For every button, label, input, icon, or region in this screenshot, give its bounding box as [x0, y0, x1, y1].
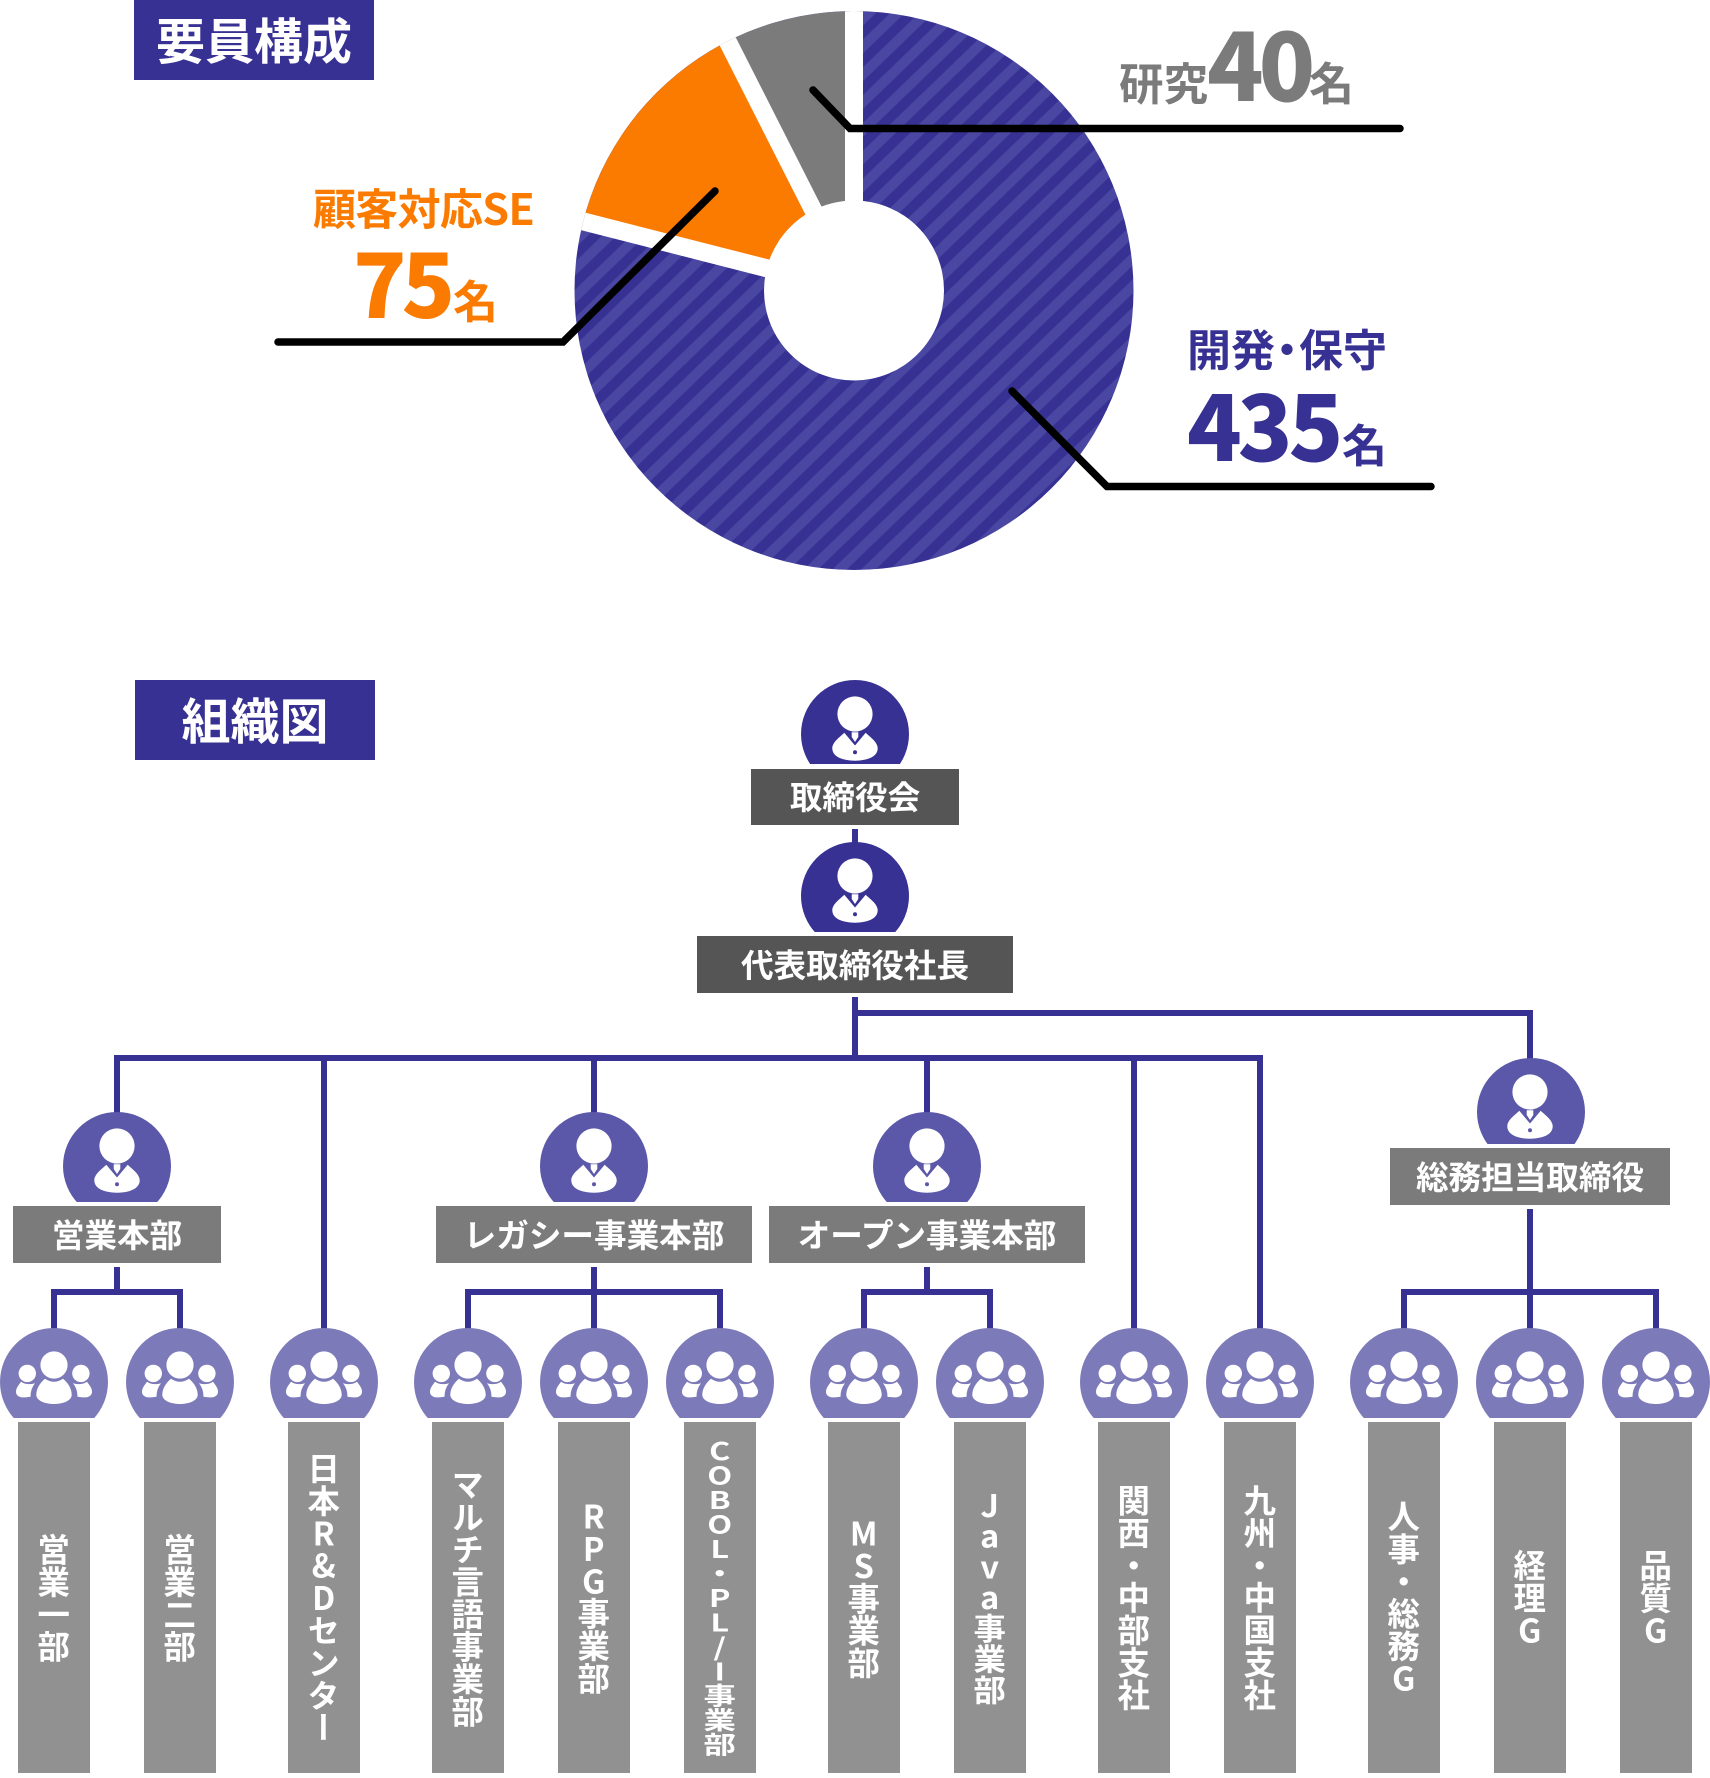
- team: 営業一部: 営業一部: [30, 1533, 77, 1662]
- team: マルチ言語事業部: [414, 1328, 522, 1773]
- label: 開発・保守 435名: 435: [1187, 357, 1339, 487]
- team: Java事業部: Java事業部: [966, 1490, 1013, 1705]
- icon: sales head: [63, 1112, 171, 1202]
- team: 九州・中国支社: 九州・中国支社: [1236, 1484, 1283, 1711]
- label: レガシー事業本部: [436, 1206, 752, 1263]
- label: 研究 40名: 名: [1309, 48, 1354, 113]
- label: レガシー事業本部: レガシー事業本部: [464, 1210, 724, 1257]
- team: 営業二部: [126, 1328, 234, 1773]
- icon: president person: [801, 842, 909, 932]
- heading: 組織図: 組織図: [181, 683, 328, 754]
- label: 総務担当取締役: 総務担当取締役: [1416, 1152, 1644, 1199]
- node: 取締役会: [751, 680, 959, 825]
- team: 日本R&Dセンター: [270, 1328, 378, 1773]
- team: 人事・総務G: 人事・総務G: [1380, 1500, 1427, 1695]
- label: 代表取締役社長: 代表取締役社長: [741, 940, 969, 987]
- donut chart: staff composition: [274, 11, 1435, 570]
- label: オープン事業本部: オープン事業本部: [798, 1210, 1056, 1257]
- label: 取締役会: 取締役会: [790, 772, 920, 819]
- node: 総務担当取締役: [1390, 1058, 1670, 1205]
- team: 関西・中部支社: [1080, 1328, 1188, 1773]
- node: 代表取締役社長: [697, 842, 1013, 993]
- label: 営業本部: 営業本部: [52, 1210, 182, 1257]
- leader line: customer SE: [278, 191, 715, 342]
- label: 開発・保守 435名: [1187, 315, 1387, 487]
- team: マルチ言語事業部: マルチ言語事業部: [444, 1468, 491, 1727]
- icon: legacy head: [540, 1112, 648, 1202]
- icon: open head: [873, 1112, 981, 1202]
- team: 品質G: [1602, 1328, 1710, 1773]
- label: 開発・保守 435名: 開発・保守: [1187, 315, 1387, 379]
- node: 営業本部: [13, 1112, 221, 1263]
- heading: 組織図: [135, 680, 375, 760]
- label: 研究 40名: [1119, 0, 1354, 128]
- node: オープン事業本部: [769, 1112, 1085, 1263]
- label: 顧客対応SE 75名: 75: [353, 217, 450, 344]
- label: 研究 40名: 研究: [1119, 48, 1208, 113]
- label: 営業本部: [13, 1206, 221, 1263]
- team: RPG事業部: RPG事業部: [570, 1500, 617, 1695]
- team: 営業二部: 営業二部: [156, 1533, 203, 1662]
- team: 品質G: 品質G: [1632, 1549, 1679, 1646]
- label: 顧客対応SE 75名: 名: [453, 266, 498, 331]
- label: 代表取締役社長: [697, 936, 1013, 993]
- icon: board person: [801, 680, 909, 764]
- team: 九州・中国支社: [1206, 1328, 1314, 1773]
- heading: 要員構成: 要員構成: [156, 3, 352, 74]
- team: 関西・中部支社: 関西・中部支社: [1110, 1484, 1157, 1711]
- label: 顧客対応SE 75名: 顧客対応SE: [313, 176, 534, 238]
- node: レガシー事業本部: [436, 1112, 752, 1263]
- team: RPG事業部: [540, 1328, 648, 1773]
- label: 顧客対応SE 75名: [313, 176, 534, 344]
- team: COBOL・PL/I事業部: COBOL・PL/I事業部: [696, 1439, 743, 1757]
- label: 開発・保守 435名: 名: [1342, 410, 1387, 475]
- team: 日本R&Dセンター: 日本R&Dセンター: [300, 1452, 347, 1743]
- team: Java事業部: [936, 1328, 1044, 1773]
- icon: general affairs person: [1477, 1058, 1585, 1144]
- team: 経理G: 経理G: [1506, 1549, 1553, 1646]
- team: COBOL・PL/I事業部: [666, 1328, 774, 1773]
- team: 営業一部: [0, 1328, 108, 1773]
- team: MS事業部: MS事業部: [840, 1516, 887, 1678]
- team: MS事業部: [810, 1328, 918, 1773]
- label: オープン事業本部: [769, 1206, 1085, 1263]
- team: 人事・総務G: [1350, 1328, 1458, 1773]
- label: 取締役会: [751, 769, 959, 825]
- leader line: development: [1012, 391, 1431, 486]
- team: 経理G: [1476, 1328, 1584, 1773]
- label: 総務担当取締役: [1390, 1148, 1670, 1205]
- leader line: research: [813, 90, 1400, 128]
